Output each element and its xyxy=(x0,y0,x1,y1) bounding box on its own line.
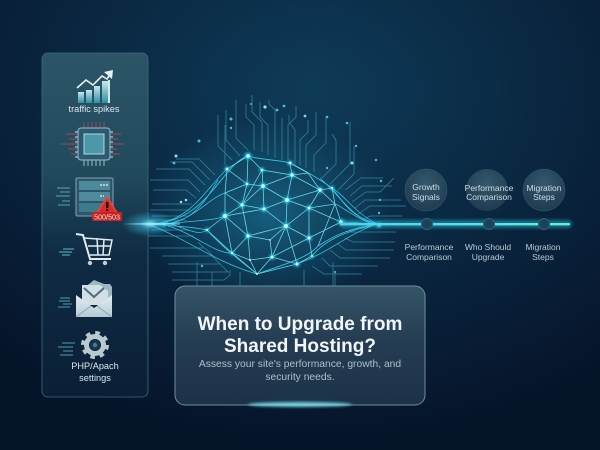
step circle: Growth Signals: Signals xyxy=(412,192,440,202)
heading: When to Upgrade from xyxy=(198,314,402,335)
circuit end dots xyxy=(173,103,382,273)
step circle: Migration Steps xyxy=(523,169,565,211)
horizontal light beam xyxy=(122,211,572,237)
step circle: Performance Comparison xyxy=(465,169,514,211)
label: PHP/Apach settings: PHP/Apach xyxy=(71,361,119,371)
icon: processor chip xyxy=(61,122,124,166)
network nodes xyxy=(163,154,380,275)
panel: left icon column xyxy=(42,53,148,397)
labels below timeline: Performance xyxy=(405,242,454,252)
step circle: Performance Comparison: Performance xyxy=(465,183,514,193)
panel: title card xyxy=(175,286,425,407)
circuit traces around the network xyxy=(146,95,406,286)
timeline: right steps xyxy=(405,169,565,262)
label: PHP/Apach settings: settings xyxy=(79,373,111,383)
labels below timeline: Comparison xyxy=(406,252,452,262)
label: traffic spikes: traffic spikes xyxy=(69,104,120,114)
network node glows xyxy=(162,152,382,267)
labels below timeline: Who Should xyxy=(465,242,511,252)
timeline nodes xyxy=(422,218,550,230)
central neural network mesh xyxy=(150,156,380,274)
step circle: Growth Signals xyxy=(405,169,447,211)
labels below timeline: Upgrade xyxy=(472,252,505,262)
labels below timeline: Migration xyxy=(526,242,561,252)
step circle: Performance Comparison: Comparison xyxy=(466,192,512,202)
step circle: Growth Signals: Growth xyxy=(412,182,440,192)
heading: Shared Hosting? xyxy=(224,336,376,357)
icon: shopping cart xyxy=(59,234,112,265)
labels below timeline: Steps xyxy=(532,252,554,262)
labels below timeline xyxy=(405,242,561,262)
subtitle: Assess your site's performance, growth, and xyxy=(199,359,401,370)
icon: open envelope xyxy=(58,280,112,317)
icon: settings gear xyxy=(58,333,107,357)
icon: traffic spikes growth chart xyxy=(77,70,113,103)
subtitle: security needs. xyxy=(265,372,335,383)
step circle: Migration Steps: Migration xyxy=(527,183,562,193)
step circle: Migration Steps: Steps xyxy=(533,192,555,202)
icon: server with 500/503 warning: 500/503 xyxy=(94,212,120,222)
icon: server with 500/503 warning xyxy=(56,178,122,222)
